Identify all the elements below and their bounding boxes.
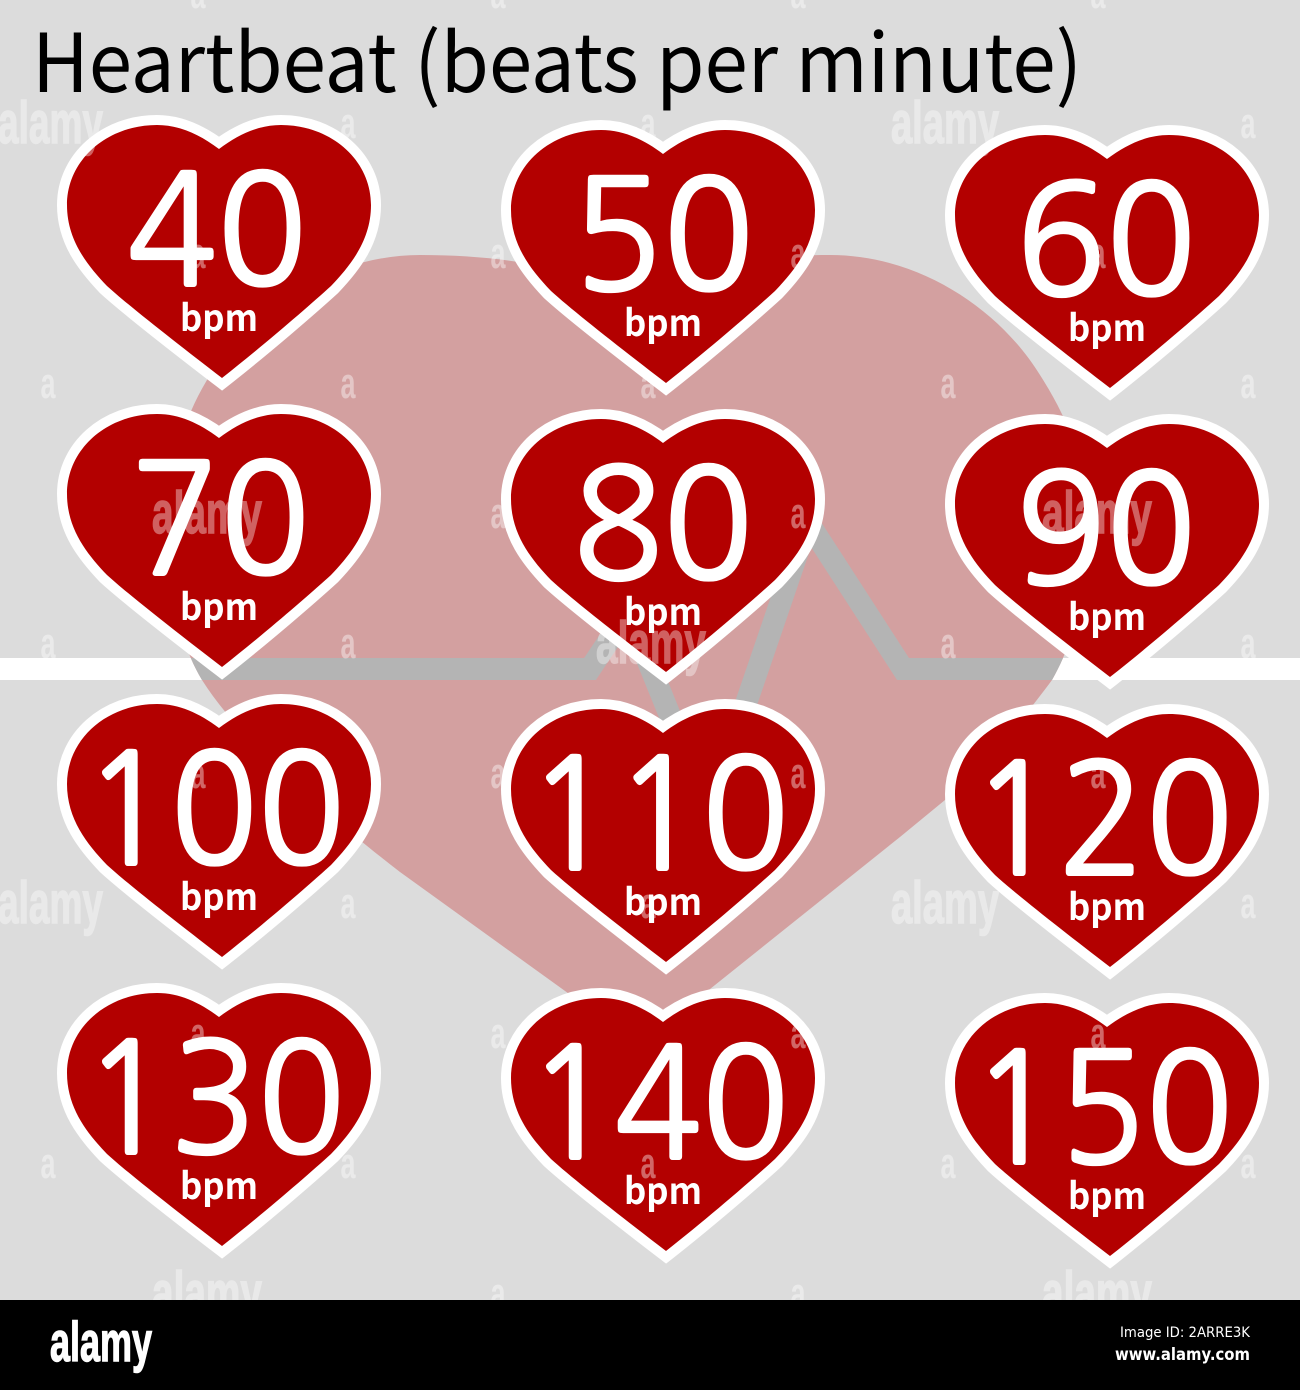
heart: 70 bpm: 70 — [130, 444, 310, 597]
heart: 50 bpm — [511, 130, 815, 383]
heart: 70 bpm — [67, 414, 371, 667]
heart: 150 bpm: bpm — [1068, 1166, 1146, 1220]
heart: 140 bpm: bpm — [624, 1161, 702, 1215]
heart: 130 bpm: 130 — [83, 1023, 345, 1176]
watermarks: a — [640, 1139, 656, 1188]
website: www.alamy.com — [1115, 1345, 1250, 1365]
heart: 140 bpm — [511, 998, 815, 1251]
watermarks: a — [40, 1139, 56, 1188]
watermarks: a — [940, 1139, 956, 1188]
watermarks: a — [490, 1269, 506, 1318]
watermarks: a — [190, 1009, 206, 1058]
watermarks: a — [340, 879, 356, 928]
heart: 120 bpm: 120 — [971, 744, 1233, 897]
title: Heartbeat (beats per minute) — [32, 0, 1082, 116]
watermarks: a — [490, 489, 506, 538]
watermarks: a — [340, 99, 356, 148]
watermarks: alamy — [891, 90, 999, 156]
heart: 90 bpm: bpm — [1068, 587, 1146, 641]
watermarks: a — [340, 619, 356, 668]
heart: 50 bpm: bpm — [624, 293, 702, 347]
large background heart — [170, 255, 1086, 1045]
watermarks: a — [790, 489, 806, 538]
heart: 40 bpm: bpm — [180, 288, 258, 342]
watermarks: alamy — [152, 1260, 262, 1326]
watermarks: a — [640, 879, 656, 928]
watermarks: a — [1090, 1009, 1106, 1058]
watermarks: a — [790, 229, 806, 278]
heart: 130 bpm: bpm — [180, 1156, 258, 1210]
watermarks: alamy — [891, 870, 999, 936]
watermarks: alamy — [1042, 480, 1152, 546]
watermarks: alamy — [0, 870, 103, 936]
heart: 150 bpm: 150 — [971, 1033, 1233, 1186]
watermarks: a — [40, 359, 56, 408]
watermarks: a — [490, 749, 506, 798]
image id: Image ID: 2ARRE3K — [1120, 1325, 1250, 1341]
heart: 100 bpm: 100 — [83, 734, 345, 887]
heart: 90 bpm — [955, 424, 1259, 677]
footer bar — [0, 1300, 1300, 1390]
heart: 80 bpm: bpm — [624, 582, 702, 636]
watermarks: a — [640, 359, 656, 408]
watermarks: alamy — [0, 90, 103, 156]
heart: 50 bpm: 50 — [572, 160, 754, 313]
heart: 60 bpm: bpm — [1068, 298, 1146, 352]
watermarks: a — [340, 1139, 356, 1188]
watermarks: a — [940, 619, 956, 668]
watermarks: a — [490, 1009, 506, 1058]
watermarks: a — [1090, 229, 1106, 278]
heart: 140 bpm: 140 — [527, 1028, 789, 1181]
watermarks: alamy — [152, 480, 262, 546]
watermarks: a — [1090, 749, 1106, 798]
watermarks: a — [790, 1269, 806, 1318]
heart: 40 bpm: 40 — [127, 155, 307, 308]
heart: 110 bpm: bpm — [624, 872, 702, 926]
watermarks: alamy — [596, 610, 706, 676]
watermarks: a — [1240, 1139, 1256, 1188]
heart: 80 bpm — [511, 419, 815, 672]
pulse line across the large heart — [190, 524, 1063, 720]
heart: 130 bpm — [67, 993, 371, 1246]
watermarks: a — [190, 749, 206, 798]
watermarks: a — [340, 359, 356, 408]
heart: 80 bpm: 80 — [573, 449, 753, 602]
heart: 60 bpm — [955, 135, 1259, 388]
heart: 100 bpm: bpm — [180, 867, 258, 921]
watermarks: alamy — [1042, 1260, 1152, 1326]
watermarks: a — [790, 1009, 806, 1058]
heart: 70 bpm: bpm — [180, 577, 258, 631]
heart: 110 bpm: 110 — [527, 739, 789, 892]
watermarks: a — [940, 359, 956, 408]
watermarks: a — [190, 229, 206, 278]
heart: 120 bpm — [955, 714, 1259, 967]
watermarks: a — [1240, 879, 1256, 928]
heart: 90 bpm: 90 — [1016, 454, 1196, 607]
watermarks: a — [1240, 619, 1256, 668]
white pulse baseline — [0, 658, 1300, 680]
heart: 40 bpm — [67, 125, 371, 378]
watermarks: a — [640, 99, 656, 148]
watermarks: a — [40, 619, 56, 668]
watermarks: a — [1240, 99, 1256, 148]
heart: 100 bpm — [67, 704, 371, 957]
heart: 60 bpm: 60 — [1016, 165, 1196, 318]
heart: 150 bpm — [955, 1003, 1259, 1256]
heart: 110 bpm — [511, 709, 815, 962]
heart: 120 bpm: bpm — [1068, 877, 1146, 931]
footer logo: alamy — [50, 1310, 152, 1373]
watermarks: a — [790, 749, 806, 798]
watermarks: a — [1240, 359, 1256, 408]
watermarks: a — [490, 229, 506, 278]
